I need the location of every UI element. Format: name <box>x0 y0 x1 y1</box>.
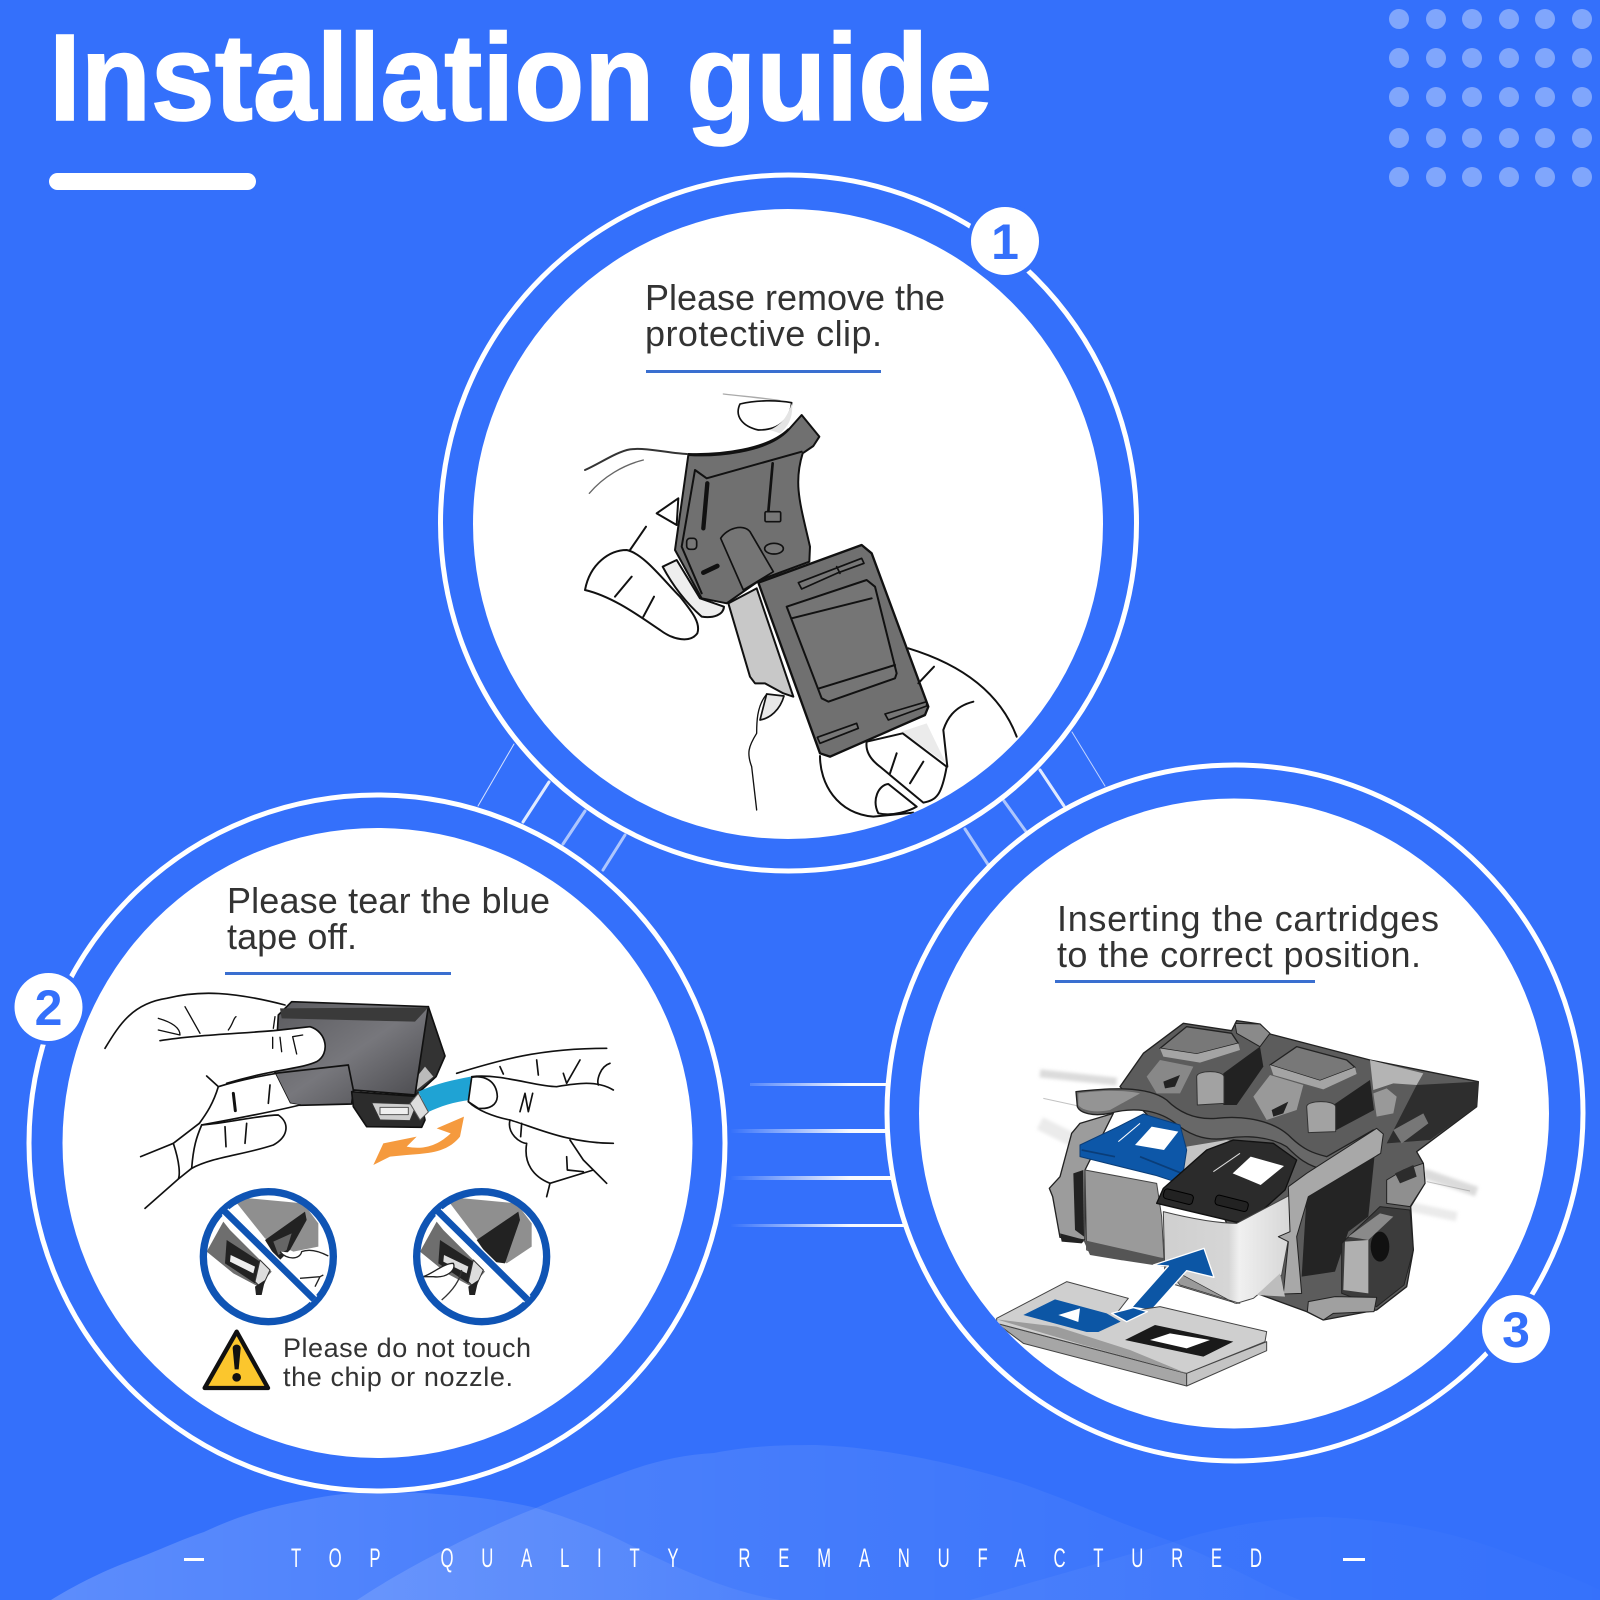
panel: step 2 tear tape <box>10 795 725 1491</box>
title underline bar <box>49 173 256 190</box>
orange arrow <box>373 1117 464 1165</box>
badge 2 <box>10 969 86 1045</box>
footer dash left <box>184 1558 204 1561</box>
footer tagline <box>184 1543 1365 1573</box>
no-touch icons and warning <box>203 1192 547 1388</box>
illustration: hands removing protective clip <box>585 393 1017 817</box>
second cartridge lid <box>1270 1047 1355 1081</box>
step 2 heading <box>227 880 550 957</box>
connector lines between circles <box>478 732 1105 1227</box>
carriage back silhouette <box>1120 1021 1478 1320</box>
step 2 heading: Please tear the blue <box>227 880 550 921</box>
right hand <box>457 1048 613 1197</box>
footer text: TOP QUALITY REMANUFACTURED <box>291 1543 1262 1573</box>
side of cartridge <box>728 588 793 697</box>
step 3 heading <box>1057 898 1439 975</box>
bottom frame <box>1307 1297 1377 1320</box>
badge 3 <box>1478 1291 1554 1367</box>
white disc 1 <box>473 209 1103 839</box>
icon: no touch chip <box>417 1192 547 1322</box>
second cylinder <box>1307 1102 1336 1133</box>
illustration: hands tearing blue tape <box>105 993 613 1208</box>
icon: no touch nozzle <box>203 1192 333 1322</box>
title: Installation guide <box>49 10 992 147</box>
ring 2 <box>29 795 725 1491</box>
step 3 heading underline <box>1055 980 1315 983</box>
right front frame <box>1302 1152 1375 1277</box>
step 1 heading <box>645 277 945 354</box>
right side mechanism <box>1342 1163 1425 1307</box>
white cartridge <box>1163 1195 1294 1303</box>
step 1 heading: Please remove the <box>645 277 945 318</box>
colour cartridge body <box>1085 1170 1164 1258</box>
icon: warning triangle <box>205 1332 268 1388</box>
illustration: print carriage with cartridges <box>997 1021 1478 1386</box>
badge 3: 3 <box>1502 1302 1530 1358</box>
panel: step 3 insert cartridges <box>887 765 1583 1461</box>
badge 1 <box>967 203 1043 279</box>
dot grid decoration <box>1389 9 1592 187</box>
ring 1 <box>440 175 1136 871</box>
blue tape <box>418 1077 471 1112</box>
step 3 heading: Inserting the cartridges <box>1057 898 1439 939</box>
left hand <box>105 993 325 1208</box>
step 1 heading underline <box>646 370 881 373</box>
cartridge contact face <box>758 545 928 757</box>
first cylinder <box>1197 1072 1224 1105</box>
top thumb <box>690 393 793 454</box>
step 3 heading: to the correct position. <box>1057 934 1421 975</box>
lower body under blue lid <box>1184 1140 1230 1169</box>
background waves <box>51 1445 1600 1600</box>
white disc 3 <box>919 798 1549 1428</box>
first cartridge lid <box>1160 1027 1238 1054</box>
warning text: the chip or nozzle. <box>283 1362 513 1392</box>
black lid <box>1157 1140 1297 1222</box>
left hand <box>585 449 724 639</box>
footer dash right <box>1343 1558 1365 1561</box>
step 2 heading: tape off. <box>227 916 357 957</box>
panel: step 1 remove clip <box>440 175 1136 871</box>
white disc 2 <box>62 828 692 1458</box>
carriage motion streaks <box>1040 1073 1477 1217</box>
gray retaining strap <box>1076 1089 1377 1170</box>
badge 2: 2 <box>35 980 62 1036</box>
right hand <box>749 648 1017 817</box>
clip <box>675 415 819 603</box>
step 1 heading: protective clip. <box>645 313 882 354</box>
left case <box>1049 1113 1113 1240</box>
ring 3 <box>887 765 1583 1461</box>
warning text <box>283 1333 531 1392</box>
right tray detail <box>1370 1060 1423 1090</box>
tray with cartridge icons <box>997 1282 1267 1386</box>
warning text: Please do not touch <box>283 1333 531 1363</box>
cartridge <box>275 1002 445 1127</box>
step 2 heading underline <box>225 972 451 975</box>
blue insertion arrow <box>1132 1248 1214 1310</box>
badge 1: 1 <box>991 214 1019 270</box>
blue lid <box>1080 1114 1187 1182</box>
